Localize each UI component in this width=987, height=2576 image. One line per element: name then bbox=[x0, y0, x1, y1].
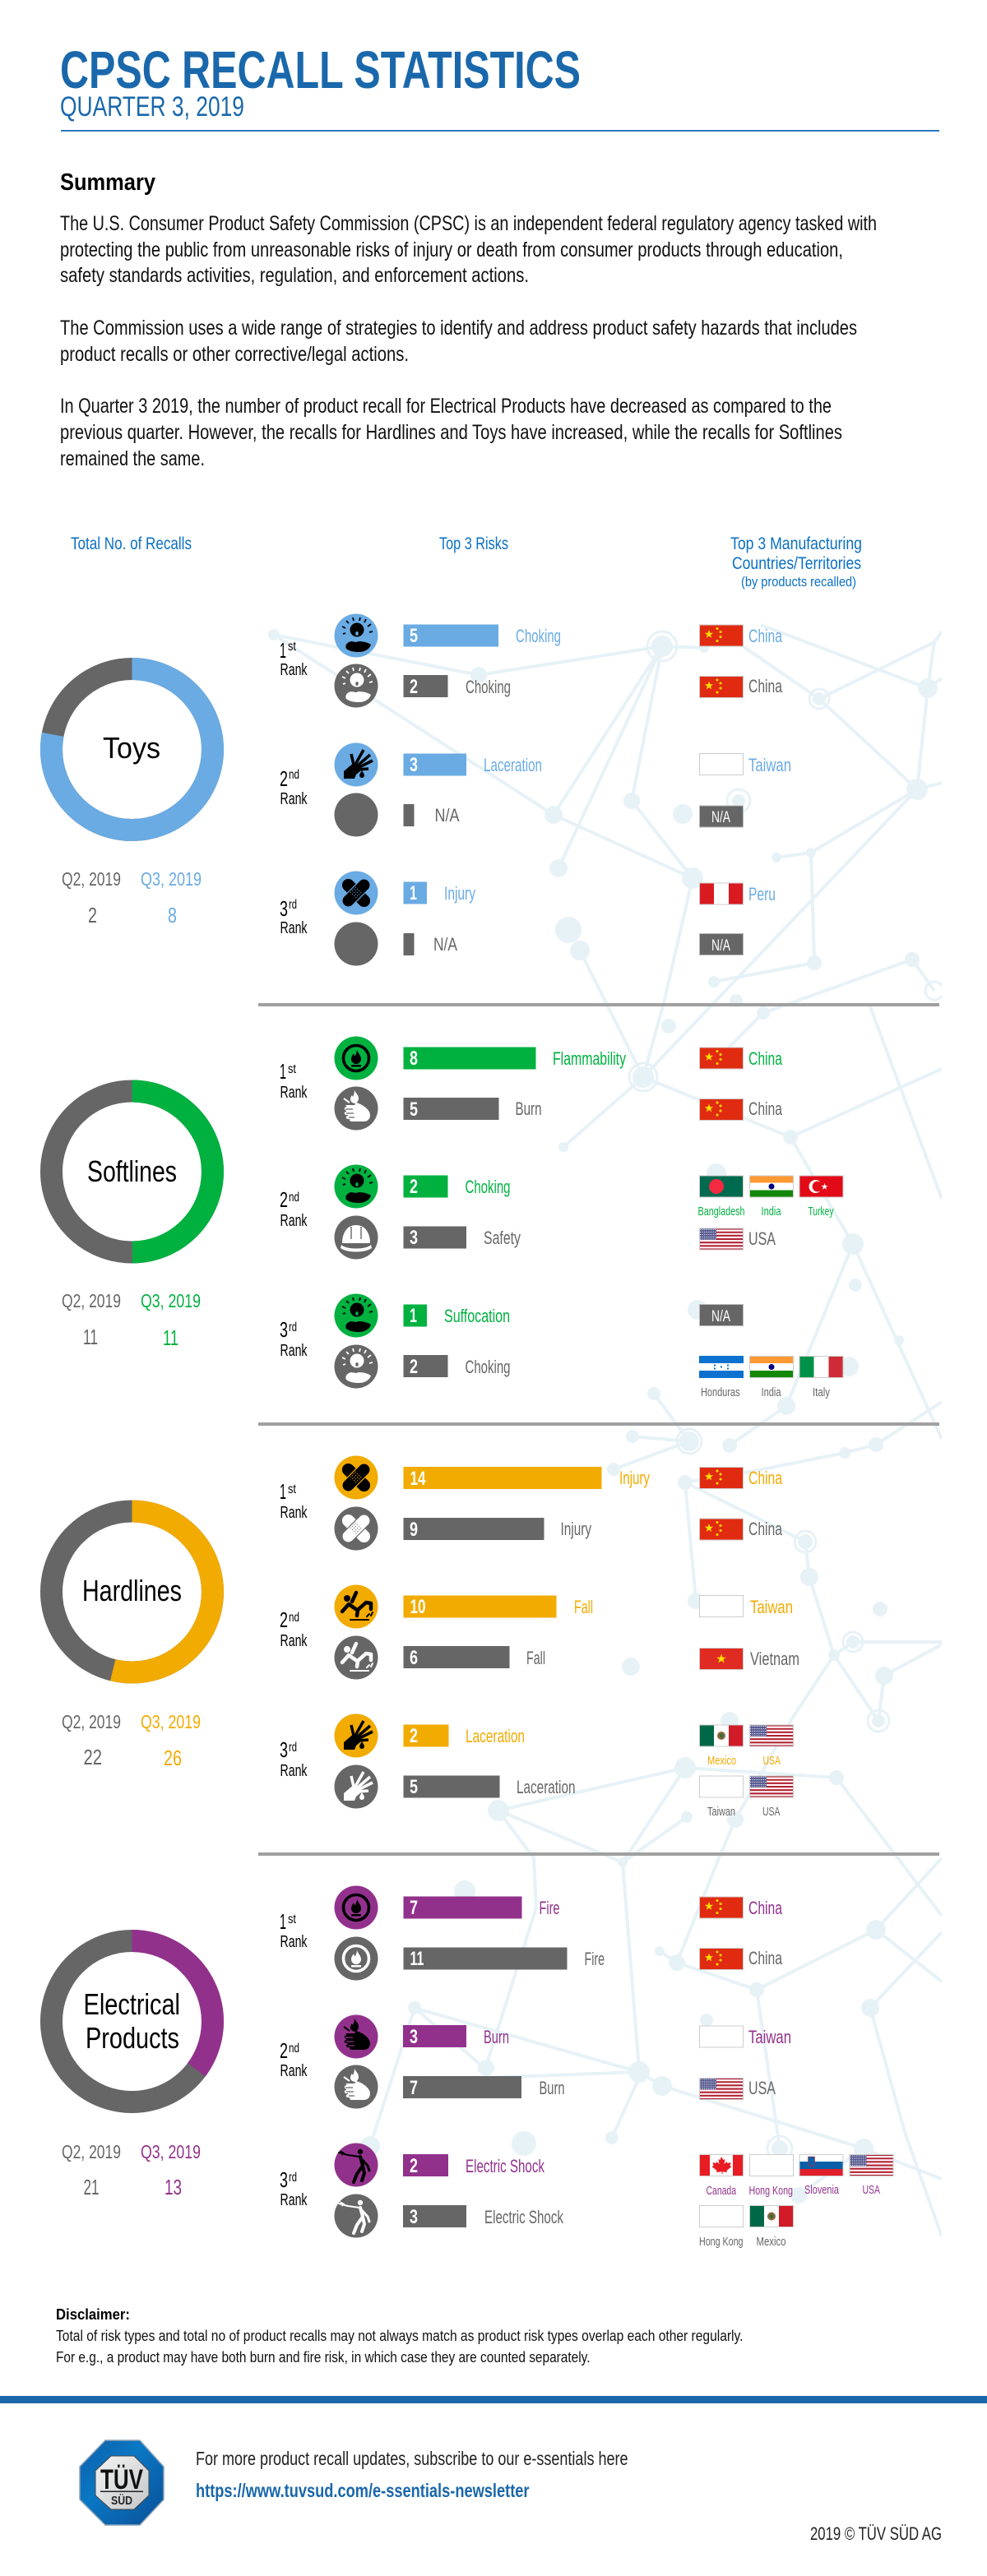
risk label: Burn bbox=[484, 2027, 509, 2047]
flag: India: India bbox=[762, 1385, 781, 1399]
flag: India: India bbox=[762, 1205, 781, 1219]
bar: 14 bbox=[403, 1467, 602, 1490]
icon: fall bbox=[334, 1585, 378, 1628]
row: rank 3 Q2 bbox=[334, 1764, 794, 1819]
icon: laceration bbox=[334, 1713, 378, 1758]
bar: 3 bbox=[403, 2025, 466, 2048]
bar: 7: 7 bbox=[410, 2077, 418, 2099]
bar: 2: 2 bbox=[410, 1176, 418, 1198]
flag: India bbox=[749, 1176, 794, 1219]
risk label: Fall bbox=[526, 1648, 545, 1668]
rank 1 label: st bbox=[288, 640, 296, 654]
rank 2 label: Rank bbox=[280, 790, 308, 808]
rank 1 label: 1 bbox=[280, 638, 286, 663]
icon: choking bbox=[334, 1164, 378, 1209]
flag: China bbox=[699, 1098, 744, 1121]
risk label: Burn bbox=[540, 2078, 564, 2098]
risk label: Injury bbox=[561, 1519, 591, 1539]
country N/A box bbox=[699, 933, 744, 955]
newsletter link: https://www.tuvsud.com/e-ssentials-newsletter bbox=[196, 2480, 530, 2501]
row: rank 1 Q3 bbox=[334, 613, 783, 658]
rank 2 label: Rank bbox=[280, 1212, 308, 1230]
bar: 3 bbox=[403, 1227, 466, 1249]
bar: 1: 1 bbox=[410, 1305, 417, 1327]
flag: Turkey bbox=[799, 1176, 844, 1219]
column heading: top 3 risks: Top 3 Risks bbox=[439, 534, 508, 553]
bar: 6: 6 bbox=[410, 1647, 418, 1669]
row: rank 1 Q3 bbox=[334, 1036, 783, 1080]
bar: 7: 7 bbox=[410, 1897, 418, 1919]
country N/A box: N/A bbox=[711, 809, 730, 826]
country label: China bbox=[748, 1098, 783, 1119]
flag: Italy: Italy bbox=[813, 1385, 830, 1399]
quarterly totals: Q2, 2019 bbox=[62, 1290, 121, 1311]
bar: 2 bbox=[403, 1725, 449, 1747]
summary text: safety standards activities, regulation, and enforcement actions. bbox=[60, 264, 529, 287]
icon: choking bbox=[334, 1345, 378, 1388]
row: rank 3 Q2 bbox=[334, 923, 744, 965]
bar: 5 bbox=[403, 625, 498, 647]
row: rank 1 Q2 bbox=[334, 1087, 783, 1130]
risk label: Injury bbox=[444, 883, 475, 904]
icon: choking bbox=[334, 613, 378, 658]
panel: softlines bbox=[51, 1036, 844, 1399]
bar: 3: 3 bbox=[410, 2026, 418, 2048]
icon: blank bbox=[334, 793, 378, 837]
icon: laceration bbox=[334, 743, 378, 786]
rank 1 label: 1 bbox=[280, 1059, 286, 1084]
bar: 1 bbox=[403, 1304, 427, 1327]
rank 1 label: Rank bbox=[280, 1084, 308, 1102]
country label: Peru bbox=[748, 884, 776, 904]
bar: 2: 2 bbox=[410, 1356, 418, 1378]
quarterly totals: Q3, 2019 bbox=[141, 868, 202, 890]
icon: burn bbox=[334, 2014, 378, 2059]
flag: Peru bbox=[699, 883, 744, 904]
bar: 7 bbox=[403, 2076, 521, 2099]
flag: China bbox=[699, 1518, 744, 1541]
flag: China bbox=[699, 1467, 744, 1489]
rank 2 label: Rank bbox=[280, 2062, 308, 2080]
rank 2 label: nd bbox=[289, 1611, 299, 1625]
icon: burn bbox=[334, 2065, 378, 2108]
summary heading: Summary bbox=[60, 169, 155, 196]
disclaimer: Disclaimer: bbox=[56, 2306, 130, 2323]
rank 2 label bbox=[280, 1607, 308, 1650]
icon: electric shock bbox=[334, 2143, 378, 2187]
rank 2 label: 2 bbox=[280, 1607, 288, 1632]
flag: Taiwan bbox=[699, 1595, 744, 1617]
icon: electric shock bbox=[334, 2194, 378, 2238]
risk label: Laceration bbox=[484, 755, 542, 775]
row: rank 1 Q3 bbox=[334, 1886, 783, 1929]
column heading: top 3 countries: (by products recalled) bbox=[741, 574, 856, 590]
bar: 5: 5 bbox=[410, 1776, 418, 1798]
bar: 1 bbox=[403, 881, 427, 904]
bar: 3: 3 bbox=[410, 754, 418, 776]
rank 2 label: 2 bbox=[280, 2038, 288, 2063]
risk label: N/A bbox=[434, 805, 460, 826]
flag: China bbox=[699, 1948, 744, 1970]
rank 1 label bbox=[280, 1479, 308, 1522]
rank 3 label: rd bbox=[289, 898, 297, 912]
panel: hardlines bbox=[51, 1455, 799, 1819]
bar: 3: 3 bbox=[410, 2206, 418, 2228]
flag: Bangladesh: Bangladesh bbox=[697, 1205, 745, 1219]
row: rank 2 Q2 bbox=[334, 1215, 776, 1260]
row: rank 2 Q2 bbox=[334, 793, 744, 837]
rank 1 label: st bbox=[288, 1062, 296, 1076]
quarterly totals: 26 bbox=[164, 1746, 182, 1770]
summary text: remained the same. bbox=[60, 447, 205, 470]
donut chart: electrical products bbox=[51, 1940, 212, 2102]
flag: Taiwan: Taiwan bbox=[707, 1805, 735, 1819]
country N/A box: N/A bbox=[711, 1308, 730, 1325]
flag: India bbox=[749, 1356, 794, 1399]
country label: China bbox=[748, 1948, 783, 1968]
icon: fire bbox=[334, 1886, 378, 1929]
logo: TÜV SÜD: SÜD bbox=[111, 2494, 132, 2508]
rank 1 label: 1 bbox=[280, 1909, 286, 1934]
icon: injury bbox=[334, 872, 378, 914]
flag: Honduras: Honduras bbox=[701, 1385, 740, 1399]
risk label: Injury bbox=[619, 1468, 650, 1488]
risk label: Flammability bbox=[553, 1048, 626, 1069]
column heading: top 3 countries bbox=[730, 534, 862, 590]
rank 1 label: st bbox=[288, 1912, 296, 1926]
icon: injury bbox=[334, 1506, 378, 1551]
subtitle: QUARTER 3, 2019 bbox=[60, 91, 244, 123]
quarterly totals: Q3, 2019 bbox=[141, 1290, 201, 1311]
flag: Canada: Canada bbox=[706, 2184, 736, 2198]
country label: China bbox=[748, 1048, 783, 1069]
bar: 5: 5 bbox=[410, 1098, 418, 1121]
donut label: Products bbox=[86, 2021, 179, 2055]
risk label: Fire bbox=[540, 1898, 559, 1918]
quarterly totals: Q2, 2019 bbox=[62, 868, 121, 890]
country N/A box bbox=[699, 806, 744, 827]
column heading: top 3 countries: Countries/Territories bbox=[732, 554, 861, 573]
column heading: total recalls: Total No. of Recalls bbox=[71, 534, 192, 553]
bar: 5 bbox=[403, 1776, 500, 1798]
row: rank 1 Q3 bbox=[334, 1455, 783, 1500]
flag: Mexico: Mexico bbox=[757, 2235, 786, 2249]
flag: USA: USA bbox=[762, 1805, 780, 1819]
risk label: Fall bbox=[574, 1597, 593, 1617]
risk label: Laceration bbox=[466, 1726, 525, 1746]
section divider bbox=[258, 1003, 939, 1006]
bar: 11 bbox=[403, 1947, 568, 1970]
summary text bbox=[60, 212, 877, 470]
bar: 2: 2 bbox=[410, 676, 418, 698]
flag: Mexico bbox=[749, 2205, 794, 2249]
bar: 6 bbox=[403, 1646, 510, 1669]
background network pattern bbox=[268, 625, 943, 2236]
rank 3 label bbox=[280, 2167, 308, 2209]
rank 3 label: 3 bbox=[280, 896, 288, 921]
country label: USA bbox=[748, 2078, 776, 2098]
row: rank 3 Q2 bbox=[334, 1345, 844, 1399]
country label: Taiwan bbox=[748, 2027, 791, 2047]
donut label bbox=[84, 1987, 180, 2055]
bar: 2: 2 bbox=[410, 1725, 418, 1747]
logo: TÜV SÜD bbox=[80, 2440, 164, 2525]
donut label: Electrical bbox=[84, 1987, 180, 2021]
country label: China bbox=[748, 626, 783, 646]
icon: blank bbox=[334, 923, 378, 965]
rank 1 label: Rank bbox=[280, 1933, 308, 1951]
rank 2 label: nd bbox=[289, 2042, 299, 2056]
bar: 8 bbox=[403, 1048, 536, 1070]
risk label: Choking bbox=[466, 677, 511, 697]
flag: Slovenia bbox=[799, 2154, 844, 2197]
bar: 9 bbox=[403, 1518, 544, 1541]
bar: 7 bbox=[403, 1896, 521, 1919]
risk label: Electric Shock bbox=[484, 2207, 564, 2227]
rank 1 label: Rank bbox=[280, 1504, 308, 1522]
bar: 3 bbox=[403, 2205, 466, 2228]
risk label: N/A bbox=[433, 934, 457, 955]
row: rank 1 Q2 bbox=[334, 1506, 783, 1551]
bar: 5: 5 bbox=[410, 625, 418, 647]
bar: N/A bbox=[403, 933, 415, 955]
quarterly totals: Q3, 2019 bbox=[141, 1711, 201, 1732]
rank 3 label bbox=[280, 1737, 308, 1780]
rank 2 label: Rank bbox=[280, 1632, 308, 1650]
rank 3 label: rd bbox=[289, 1741, 297, 1755]
flag: USA bbox=[749, 1725, 794, 1768]
row: rank 1 Q2 bbox=[334, 664, 783, 707]
row: rank 3 Q3 bbox=[334, 1713, 794, 1768]
icon: safety bbox=[334, 1215, 378, 1260]
donut label: Toys bbox=[103, 731, 160, 765]
flag: Honduras bbox=[699, 1356, 744, 1399]
rank 1 label: Rank bbox=[280, 661, 308, 679]
risk label: Choking bbox=[516, 626, 561, 646]
row: rank 2 Q3 bbox=[334, 743, 791, 786]
copyright: 2019 © TÜV SÜD AG bbox=[810, 2523, 942, 2544]
flag: Slovenia: Slovenia bbox=[804, 2183, 839, 2197]
rank 2 label bbox=[280, 2038, 308, 2080]
disclaimer bbox=[56, 2306, 744, 2366]
icon: burn bbox=[334, 1087, 378, 1130]
logo: TÜV SÜD: TÜV bbox=[100, 2464, 143, 2495]
quarterly totals: 22 bbox=[84, 1745, 102, 1769]
row: rank 3 Q3 bbox=[334, 1294, 744, 1337]
flag: Taiwan bbox=[699, 753, 744, 775]
row: rank 2 Q3 bbox=[334, 2014, 791, 2059]
bar: 8: 8 bbox=[410, 1048, 418, 1070]
disclaimer: For e.g., a product may have both burn and fire risk, in which case they are counted separately. bbox=[56, 2349, 591, 2366]
rank 3 label: rd bbox=[289, 1320, 297, 1334]
donut chart: toys bbox=[51, 669, 212, 830]
row: rank 2 Q2 bbox=[334, 2065, 776, 2108]
donut label: Hardlines bbox=[82, 1574, 182, 1607]
rank 1 label bbox=[280, 638, 308, 679]
bar: 2: 2 bbox=[410, 2155, 418, 2177]
rank 3 label: Rank bbox=[280, 1342, 308, 1360]
donut chart: softlines bbox=[51, 1091, 212, 1252]
flag: Turkey: Turkey bbox=[808, 1205, 834, 1219]
flag: China bbox=[699, 1048, 744, 1069]
row: rank 3 Q3 bbox=[334, 2143, 893, 2198]
flag: USA bbox=[849, 2154, 893, 2197]
flag: USA bbox=[749, 1776, 794, 1819]
rank 2 label bbox=[280, 766, 308, 808]
row: rank 2 Q3 bbox=[334, 1585, 793, 1628]
country N/A box: N/A bbox=[711, 937, 730, 955]
quarterly totals: Q2, 2019 bbox=[62, 2141, 121, 2162]
flag: Hong Kong bbox=[748, 2154, 794, 2198]
row: rank 1 Q2 bbox=[334, 1937, 783, 1980]
country label: Taiwan bbox=[750, 1597, 793, 1617]
risk label: Laceration bbox=[517, 1777, 576, 1797]
flag: USA: USA bbox=[862, 2183, 880, 2197]
risk label: Suffocation bbox=[444, 1306, 510, 1326]
footer bar bbox=[0, 2396, 987, 2403]
flag: Taiwan bbox=[699, 1776, 744, 1819]
rank 3 label: Rank bbox=[280, 2191, 308, 2209]
flag: Vietnam bbox=[699, 1648, 744, 1670]
rank 3 label: 3 bbox=[280, 1737, 288, 1762]
quarterly totals bbox=[62, 1711, 201, 1770]
risk label: Burn bbox=[515, 1098, 541, 1119]
country label: China bbox=[748, 1519, 783, 1539]
icon: suffocation bbox=[334, 1294, 378, 1337]
bar: N/A bbox=[403, 804, 415, 826]
bar: 9: 9 bbox=[410, 1519, 418, 1541]
bar: 2 bbox=[403, 1355, 447, 1378]
quarterly totals bbox=[62, 1290, 201, 1350]
flag: USA bbox=[699, 2078, 744, 2100]
panel: electrical products bbox=[51, 1886, 893, 2249]
disclaimer: Total of risk types and total no of product recalls may not always match as product risk types overlap each other regularly. bbox=[56, 2328, 744, 2344]
column heading: top 3 countries: Top 3 Manufacturing bbox=[730, 534, 862, 553]
section divider bbox=[258, 1422, 939, 1426]
rank 3 label bbox=[280, 1317, 308, 1360]
risk label: Electric Shock bbox=[466, 2156, 545, 2176]
icon: injury bbox=[334, 1455, 378, 1500]
bar: 2 bbox=[403, 2154, 448, 2177]
flag: Taiwan bbox=[699, 2026, 744, 2047]
title: CPSC RECALL STATISTICS bbox=[60, 40, 581, 99]
flag: Bangladesh bbox=[697, 1176, 745, 1219]
country label: USA bbox=[748, 1228, 776, 1249]
quarterly totals bbox=[62, 2141, 201, 2199]
flag: China bbox=[699, 676, 744, 698]
rank 2 label bbox=[280, 1187, 308, 1230]
quarterly totals: 21 bbox=[84, 2175, 99, 2199]
risk label: Choking bbox=[466, 1177, 510, 1197]
bar: 10: 10 bbox=[410, 1596, 426, 1618]
quarterly totals: 11 bbox=[83, 1325, 98, 1349]
rank 3 label: 3 bbox=[280, 2167, 288, 2192]
icon: laceration bbox=[334, 1764, 378, 1809]
icon: choking bbox=[334, 664, 378, 707]
risk label: Safety bbox=[484, 1228, 521, 1248]
rank 3 label: Rank bbox=[280, 1762, 308, 1780]
rank 1 label bbox=[280, 1909, 308, 1951]
section divider bbox=[258, 1852, 939, 1856]
flag: China bbox=[699, 1896, 744, 1919]
rank 3 label bbox=[280, 896, 308, 937]
flag: Hong Kong bbox=[699, 2205, 744, 2249]
quarterly totals: 11 bbox=[163, 1325, 178, 1350]
quarterly totals bbox=[62, 868, 202, 927]
flag: China bbox=[699, 625, 744, 646]
quarterly totals: 2 bbox=[88, 903, 97, 927]
flag: Mexico bbox=[699, 1725, 744, 1768]
quarterly totals: 8 bbox=[168, 903, 177, 927]
bar: 1: 1 bbox=[410, 882, 417, 904]
country label: Vietnam bbox=[750, 1649, 799, 1669]
donut chart: hardlines bbox=[51, 1511, 212, 1672]
newsletter text: For more product recall updates, subscribe to our e-ssentials here bbox=[196, 2448, 628, 2469]
rank 2 label: 2 bbox=[280, 766, 288, 791]
rank 1 label: st bbox=[288, 1482, 296, 1496]
country N/A box bbox=[699, 1304, 744, 1326]
rank 3 label: rd bbox=[289, 2171, 297, 2185]
rank 3 label: 3 bbox=[280, 1317, 288, 1342]
quarterly totals: Q2, 2019 bbox=[62, 1711, 121, 1732]
bar: 10 bbox=[403, 1595, 556, 1618]
row: rank 3 Q3 bbox=[334, 872, 776, 914]
bar: 5 bbox=[403, 1098, 498, 1121]
rank 2 label: 2 bbox=[280, 1187, 288, 1212]
bar: 11: 11 bbox=[410, 1948, 424, 1970]
row: rank 2 Q3 bbox=[334, 1164, 844, 1219]
risk label: Fire bbox=[584, 1949, 605, 1969]
panel: toys bbox=[51, 613, 791, 965]
bar: 2 bbox=[403, 675, 447, 698]
quarterly totals: 13 bbox=[164, 2175, 182, 2199]
icon: fall bbox=[334, 1636, 378, 1679]
rank 2 label: nd bbox=[289, 1191, 299, 1205]
country label: Taiwan bbox=[748, 755, 791, 775]
donut label: Softlines bbox=[87, 1154, 177, 1188]
flag: USA: USA bbox=[763, 1754, 781, 1768]
icon: fire bbox=[334, 1937, 378, 1980]
flag: Hong Kong: Hong Kong bbox=[748, 2184, 793, 2198]
bar: 3: 3 bbox=[410, 1227, 418, 1249]
flag: Mexico: Mexico bbox=[707, 1754, 736, 1768]
quarterly totals: Q3, 2019 bbox=[141, 2141, 201, 2162]
summary text: product recalls or other corrective/legal actions. bbox=[60, 343, 409, 366]
bar: 3 bbox=[403, 753, 466, 776]
flag: USA bbox=[699, 1228, 744, 1250]
rank 1 label: 1 bbox=[280, 1479, 286, 1504]
country label: China bbox=[748, 1468, 783, 1488]
rank 2 label: nd bbox=[289, 768, 299, 782]
row: rank 3 Q2 bbox=[334, 2194, 794, 2249]
flag: Italy bbox=[799, 1356, 844, 1399]
flag: Hong Kong: Hong Kong bbox=[699, 2235, 744, 2249]
risk label: Choking bbox=[466, 1357, 510, 1377]
country label: China bbox=[748, 1898, 783, 1918]
bar: 14: 14 bbox=[410, 1468, 426, 1490]
icon: flammability bbox=[334, 1036, 378, 1080]
bar: 2 bbox=[403, 1176, 447, 1198]
rank 1 label bbox=[280, 1059, 308, 1102]
country label: China bbox=[748, 676, 783, 696]
flag: Canada bbox=[699, 2154, 744, 2198]
row: rank 2 Q2 bbox=[334, 1636, 799, 1679]
rank 3 label: Rank bbox=[280, 919, 308, 937]
title rule bbox=[61, 130, 939, 132]
